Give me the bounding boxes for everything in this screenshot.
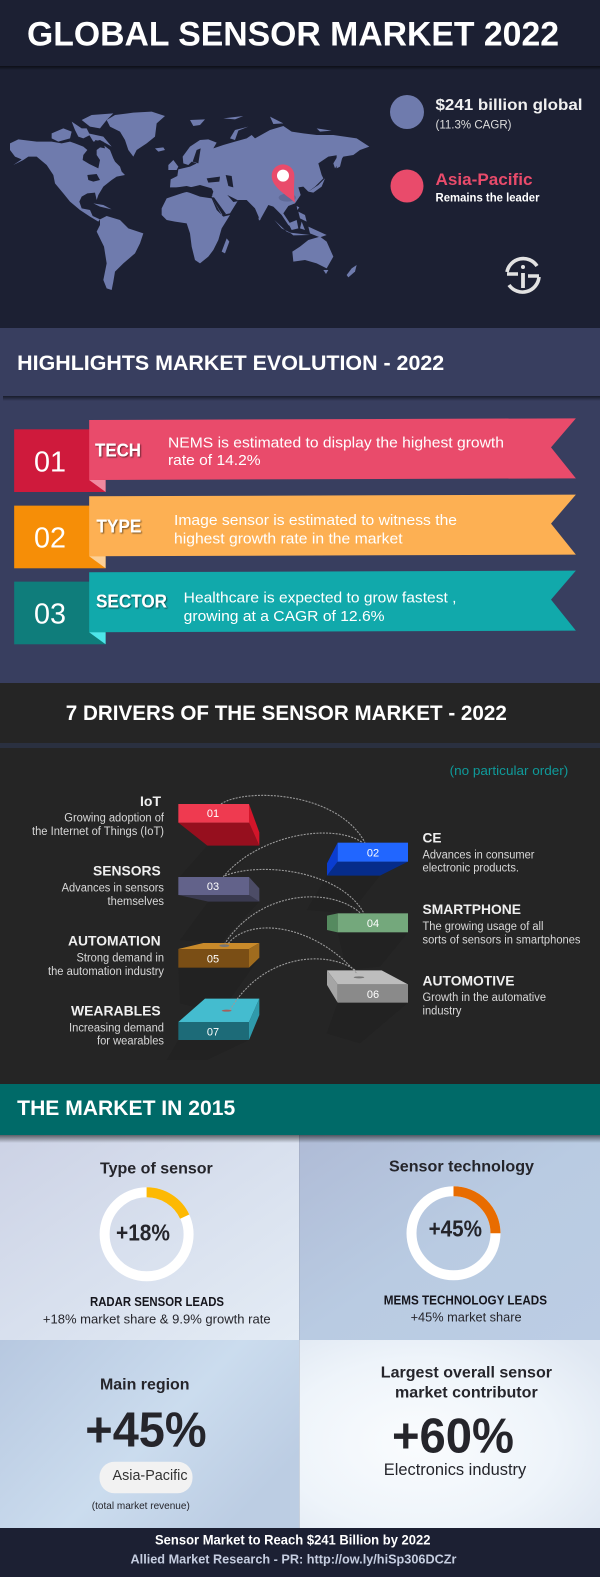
driver: sensors — [62, 863, 164, 908]
block 04 — [327, 913, 408, 932]
card: type of sensor: RADAR SENSOR LEADS — [90, 1294, 224, 1309]
legend: global value — [390, 95, 582, 131]
card: type of sensor: Type of sensor — [100, 1160, 213, 1177]
panel: market in 2015 — [0, 1084, 600, 1528]
block numbers: 07 — [207, 1026, 219, 1038]
block 01 — [178, 804, 259, 846]
driver: automation: the automation industry — [48, 966, 164, 978]
driver: CE: electronic products. — [422, 863, 519, 875]
panel: global overview — [0, 0, 600, 328]
card: sensor technology: MEMS TECHNOLOGY LEADS — [384, 1292, 547, 1307]
driver: smartphone — [422, 901, 581, 946]
card: sensor technology: Sensor technology — [389, 1159, 534, 1176]
ribbon: tech: NEMS is estimated to display the highest growth — [168, 435, 504, 451]
driver: automotive: industry — [422, 1005, 462, 1017]
block 02 — [327, 843, 408, 876]
ribbon: type: Image sensor is estimated to witness the — [174, 513, 457, 529]
driver: wearables: Increasing demand — [69, 1022, 164, 1034]
block numbers — [207, 808, 379, 1038]
block numbers: 04 — [367, 918, 379, 930]
block numbers: 01 — [207, 808, 219, 820]
card: type of sensor — [43, 1160, 271, 1326]
donut: 18% — [105, 1192, 189, 1276]
driver: IoT — [32, 793, 165, 838]
card: largest contributor: +60% — [392, 1409, 514, 1463]
driver: IoT: the Internet of Things (IoT) — [32, 826, 164, 838]
card: largest contributor — [381, 1365, 552, 1479]
block 06 — [327, 970, 408, 1003]
donut: 45% — [412, 1191, 496, 1275]
icon: logo — [507, 259, 539, 292]
footer: Sensor Market to Reach $241 Billion by 2022 — [155, 1531, 431, 1547]
icon: location pin — [272, 164, 296, 203]
footer: Allied Market Research - PR: http://ow.ly/hiSp306DCZr — [130, 1551, 456, 1566]
driver: CE: CE — [422, 829, 442, 845]
ribbon: sector — [14, 571, 576, 644]
driver: automotive: Growth in the automative — [422, 992, 546, 1004]
block 07 — [178, 999, 259, 1040]
card: sensor technology: +45% market share — [411, 1310, 522, 1325]
card: main region — [85, 1376, 207, 1512]
ribbon: sector: 03 — [34, 598, 66, 630]
ribbon: type: 02 — [34, 522, 66, 554]
block numbers: 03 — [207, 881, 219, 893]
ribbon: sector: growing at a CAGR of 12.6% — [184, 609, 385, 625]
driver: CE — [422, 829, 535, 875]
ribbon: tech: rate of 14.2% — [168, 453, 261, 469]
card: main region: +45% — [85, 1404, 207, 1458]
connector curves — [219, 795, 365, 1012]
driver: automation — [48, 933, 164, 978]
driver: CE: Advances in consumer — [422, 849, 535, 861]
driver: automotive: AUTOMOTIVE — [422, 972, 514, 988]
block numbers: 05 — [207, 954, 219, 966]
driver: automation: AUTOMATION — [68, 933, 161, 949]
world map — [10, 112, 369, 290]
block 03 — [178, 877, 259, 902]
ribbon: tech: 01 — [34, 447, 66, 479]
ribbon: sector: SECTOR — [96, 592, 167, 612]
card: type of sensor: +18% market share & 9.9% growth rate — [43, 1311, 271, 1326]
heading: market in 2015: THE MARKET IN 2015 — [17, 1097, 236, 1120]
card: sensor technology — [384, 1159, 547, 1325]
ribbon: type: TYPE — [96, 517, 141, 537]
driver: automation: Strong demand in — [76, 953, 164, 965]
ribbon: sector: Healthcare is expected to grow fastest , — [184, 591, 456, 607]
card: largest contributor: Largest overall sensor — [381, 1365, 552, 1382]
ribbon: tech — [14, 418, 576, 492]
card: main region: Main region — [100, 1376, 190, 1393]
block numbers: 02 — [367, 848, 379, 860]
driver: sensors: Advances in sensors — [62, 883, 164, 895]
card: type of sensor: +18% — [116, 1220, 170, 1246]
driver: wearables: for wearables — [97, 1036, 164, 1048]
ribbon: tech: TECH — [95, 441, 141, 461]
note: order: (no particular order) — [450, 763, 568, 778]
ribbon: type — [14, 495, 576, 568]
driver: IoT: Growing adoption of — [64, 813, 165, 825]
driver: sensors: themselves — [108, 896, 164, 908]
legend: Asia-Pacific: Remains the leader — [436, 192, 540, 204]
legend: Asia-Pacific — [390, 170, 540, 204]
driver: smartphone: sorts of sensors in smartphones — [422, 934, 581, 946]
legend: global value: $241 billion global — [436, 97, 582, 114]
driver: wearables — [69, 1003, 164, 1048]
block numbers: 06 — [367, 989, 379, 1001]
title: GLOBAL SENSOR MARKET 2022 — [27, 16, 559, 54]
footer — [0, 1528, 600, 1577]
ribbon: type: highest growth rate in the market — [174, 531, 403, 547]
panel: highlights — [0, 328, 600, 683]
legend: Asia-Pacific: Asia-Pacific — [436, 171, 532, 189]
block 05 — [178, 943, 259, 968]
driver: IoT: IoT — [140, 793, 161, 809]
driver: smartphone: The growing usage of all — [422, 921, 544, 933]
heading: drivers: 7 DRIVERS OF THE SENSOR MARKET - 2022 — [66, 702, 507, 725]
driver: sensors: SENSORS — [93, 863, 161, 879]
card: largest contributor: market contributor — [395, 1384, 538, 1401]
card: largest contributor: Electronics industry — [384, 1460, 527, 1479]
driver: wearables: WEARABLES — [71, 1003, 161, 1019]
card: sensor technology: +45% — [429, 1216, 482, 1242]
card: main region: (total market revenue) — [92, 1501, 190, 1512]
heading: highlights: HIGHLIGHTS MARKET EVOLUTION - 2022 — [17, 352, 444, 375]
diagram: stacked blocks and connectors — [167, 795, 408, 1060]
driver: automotive — [422, 972, 546, 1017]
legend: global value: (11.3% CAGR) — [436, 119, 512, 131]
driver: smartphone: SMARTPHONE — [422, 901, 521, 917]
panel: drivers — [0, 683, 600, 1084]
pill: Asia-Pacific: Asia-Pacific — [112, 1467, 188, 1484]
